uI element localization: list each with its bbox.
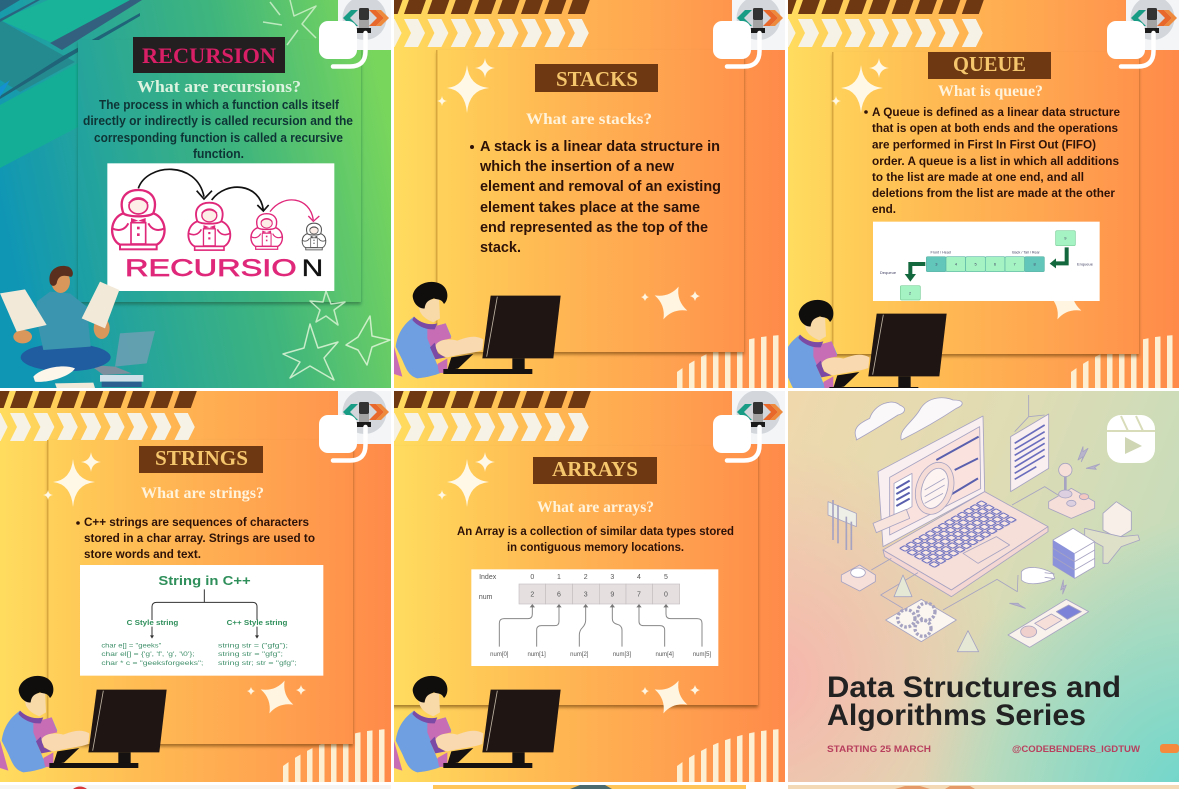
diagram: array index table: 4: [637, 574, 641, 581]
text block: queue definition: [864, 105, 1120, 216]
title: recursion: RECURSION: [142, 43, 276, 68]
diagram: queue enqueue and dequeue: Front / Head: [931, 250, 951, 254]
diagram: string in C++ tree: string str = ("gfg");: [218, 642, 288, 649]
title: recursion: [133, 37, 285, 73]
text block: stacks definition: end represented as the top of the: [480, 220, 708, 236]
text: start date: STARTING 25 MARCH: [827, 744, 931, 755]
illustration: student reading papers: [0, 266, 155, 388]
diagram: queue enqueue and dequeue: 5: [975, 262, 978, 267]
diagram: queue enqueue and dequeue: 4: [955, 262, 958, 267]
panel: strings post: [0, 389, 394, 782]
illustration: coder at monitor: [394, 676, 561, 772]
title: strings: STRINGS: [155, 446, 248, 470]
diagram: queue enqueue and dequeue: 7: [1014, 262, 1017, 267]
icon: carousel badge: [319, 21, 366, 66]
diagram: queue enqueue and dequeue: 8: [1034, 262, 1037, 267]
title: queue: QUEUE: [953, 52, 1026, 76]
icon: reels badge: [1107, 415, 1155, 463]
panel: stacks post: [381, 0, 788, 388]
title: series name: Data Structures and: [827, 671, 1121, 704]
title: series name: [827, 671, 1121, 732]
diagram: array index table: Index: [479, 574, 497, 581]
text block: recursion definition: directly or indirectly is called recursion and the: [83, 114, 353, 128]
text block: strings definition: stored in a char array. Strings are used to: [84, 531, 315, 545]
content panel: recursion: [78, 40, 361, 302]
title: arrays: [533, 457, 657, 484]
diagram: queue enqueue and dequeue: Dequeue: [880, 270, 897, 275]
text block: arrays definition: in contiguous memory locations.: [507, 540, 684, 554]
logo: club badge: [338, 389, 394, 444]
text block: arrays definition: An Array is a collection of similar data types stored: [457, 524, 734, 538]
text block: stacks definition: element takes place at the same: [480, 200, 700, 216]
diagram: array index table: num[0]: [490, 652, 509, 658]
diagram: recursion nesting dolls: N: [302, 255, 323, 282]
logo: club badge: [732, 389, 788, 444]
diagram: array index table: num[5]: [693, 652, 711, 658]
text block: recursion definition: [83, 98, 353, 161]
text block: strings definition: store words and text.: [84, 547, 201, 561]
text block: recursion definition: corresponding function is called a recursive: [94, 131, 343, 145]
text block: recursion definition: The process in which a function calls itself: [99, 98, 340, 112]
panel: queue post: [775, 0, 1179, 396]
diagram: queue enqueue and dequeue: 6: [994, 262, 997, 267]
illustration: coder at monitor: [394, 282, 561, 378]
diagram: array index table: num: [479, 594, 493, 601]
diagram: string in C++ tree: char e[] = "geeks": [101, 642, 162, 649]
text block: strings definition: [76, 517, 315, 558]
diagram: string in C++ tree: string str = "gfg";: [218, 651, 283, 658]
diagram: string in C++ tree: char el[] = {'g', 'f', 'g', '\0'};: [101, 651, 195, 658]
text block: queue definition: A Queue is defined as a linear data structure: [872, 105, 1120, 119]
title: stacks: [535, 64, 658, 92]
diagram: string in C++ tree: C++ Style string: [227, 620, 287, 627]
diagram: array index table: num[2]: [570, 652, 589, 658]
subheading: queue: What is queue?: [938, 83, 1043, 100]
text block: stacks definition: A stack is a linear data structure in: [480, 139, 720, 155]
text block: recursion definition: function.: [193, 147, 244, 161]
diagram: string in C++ tree: char * c = "geeksforgeeks";: [101, 660, 204, 667]
diagram: recursion nesting dolls: RECURSIO: [125, 255, 297, 282]
title: series name: Algorithms Series: [827, 699, 1086, 732]
diagram: recursion nesting dolls: [107, 163, 334, 291]
panel: series cover: [788, 391, 1179, 782]
text block: queue definition: that is open at both ends and the operations: [872, 121, 1118, 135]
diagram: array index table: 3: [610, 574, 614, 581]
diagram: array index table: [471, 569, 718, 666]
text: handle: @CODEBENDERS_IGDTUW: [1012, 744, 1140, 755]
title: strings: [139, 446, 263, 473]
diagram: string in C++ tree: string str; str = "gfg";: [218, 660, 297, 667]
subheading: recursion: What are recursions?: [137, 77, 301, 96]
subheading: arrays: What are arrays?: [537, 499, 654, 516]
next row peek: thumbnails: [0, 785, 1179, 789]
text block: queue definition: end.: [872, 202, 896, 216]
diagram: array index table: num[4]: [656, 652, 674, 658]
text block: arrays definition: [457, 524, 734, 554]
diagram: array index table: 2: [530, 591, 534, 598]
text block: stacks definition: which the insertion of a new: [479, 159, 675, 175]
text block: stacks definition: [470, 139, 721, 256]
icon: carousel badge: [713, 21, 760, 66]
diagram: array index table: 5: [664, 574, 668, 581]
diagram: array index table: 7: [637, 591, 641, 598]
logo: club badge: [732, 0, 788, 50]
panel: arrays post: [381, 389, 788, 782]
icon: orange pill: [1160, 744, 1179, 753]
diagram: queue enqueue and dequeue: [873, 222, 1100, 301]
diagram: array index table: 3: [584, 591, 588, 598]
text block: stacks definition: element and removal of an existing: [480, 179, 721, 195]
logo: club badge: [1126, 0, 1179, 50]
text block: queue definition: order. A queue is a list in which all additions: [872, 154, 1119, 168]
text block: queue definition: are performed in First In First Out (FIFO): [872, 138, 1096, 152]
diagram: queue enqueue and dequeue: 2: [909, 290, 912, 295]
logo: club badge: [342, 0, 389, 50]
icon: carousel badge: [1107, 21, 1154, 66]
text block: queue definition: to the list are made at one end, and all: [872, 170, 1084, 184]
illustration: coder at monitor: [788, 300, 947, 388]
diagram: array index table: 0: [664, 591, 668, 598]
diagram: queue enqueue and dequeue: Back / Tail / Rear: [1012, 250, 1041, 254]
diagram: string in C++ tree: String in C++: [158, 573, 251, 588]
text block: strings definition: C++ strings are sequences of characters: [84, 515, 309, 529]
illustration: coder at monitor: [0, 676, 167, 772]
diagram: array index table: num[1]: [528, 652, 546, 658]
title: stacks: STACKS: [556, 67, 638, 91]
subheading: stacks: What are stacks?: [526, 111, 652, 128]
text block: stacks definition: stack.: [480, 240, 521, 256]
title: arrays: ARRAYS: [552, 457, 638, 481]
icon: carousel badge: [713, 415, 760, 460]
panel: recursion post: [0, 0, 394, 388]
title: queue: [928, 52, 1051, 79]
diagram: string in C++ tree: C Style string: [127, 620, 178, 627]
diagram: queue enqueue and dequeue: 9: [1064, 236, 1067, 241]
diagram: array index table: 6: [557, 591, 561, 598]
diagram: array index table: num[3]: [613, 652, 631, 658]
diagram: queue enqueue and dequeue: Enqueue: [1077, 261, 1094, 266]
icon: star outlines: [263, 0, 390, 380]
diagram: array index table: 0: [530, 574, 534, 581]
icon: carousel badge: [319, 415, 366, 460]
subheading: strings: What are strings?: [141, 485, 264, 502]
diagram: queue enqueue and dequeue: 3: [935, 262, 938, 267]
text block: queue definition: deletions from the list are made at the other: [872, 186, 1115, 200]
illustration: isometric laptop: [828, 395, 1140, 652]
diagram: array index table: 2: [584, 574, 588, 581]
diagram: string in C++ tree: [80, 565, 323, 676]
diagram: array index table: 9: [610, 591, 614, 598]
diagram: array index table: 1: [557, 574, 561, 581]
